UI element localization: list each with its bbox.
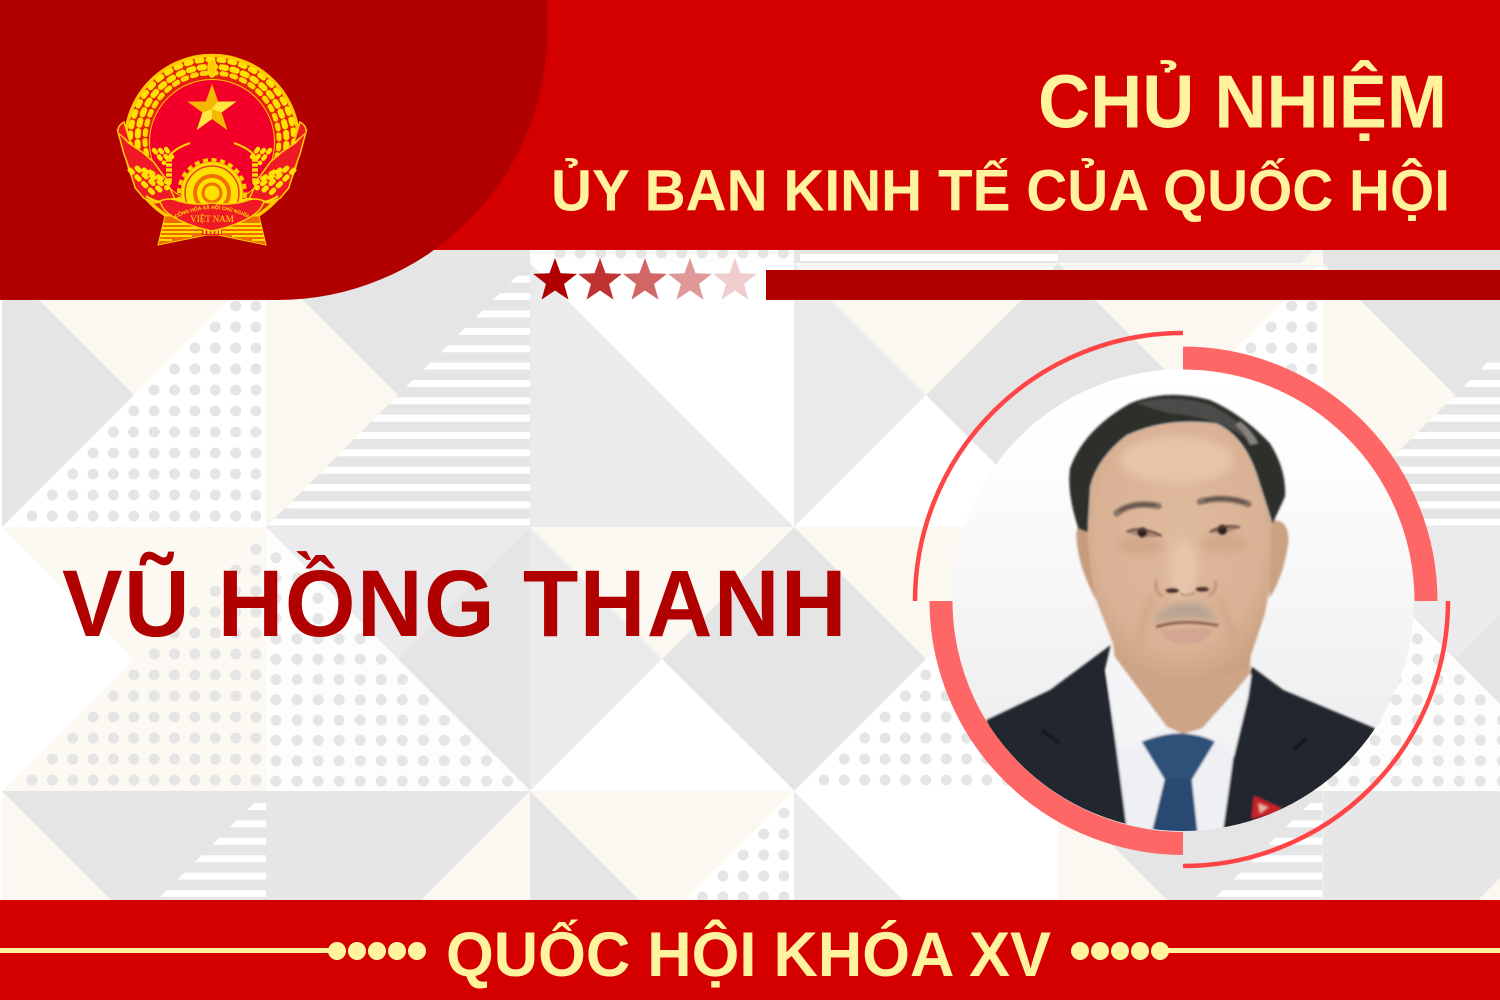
portrait photo	[952, 369, 1414, 840]
emblem gear	[179, 160, 245, 226]
shirt	[1105, 676, 1236, 830]
emblem wreath	[126, 56, 298, 228]
hair	[1069, 395, 1285, 532]
brows	[1117, 504, 1158, 513]
decorative ring: thick bottom-left arc	[941, 601, 1183, 844]
mouth	[1160, 629, 1213, 644]
emblem scroll with name	[159, 198, 265, 232]
heading: position title line 2: ỦY BAN KINH TẾ CỦA QUỐC HỘI	[551, 158, 1450, 224]
footer right ornament	[1071, 942, 1500, 960]
background: geometric triangle pattern	[2, 250, 1500, 900]
suit	[987, 645, 1128, 840]
footer band	[0, 900, 1500, 1000]
emblem star	[188, 84, 236, 130]
neck	[1112, 643, 1252, 735]
emblem ribbons and rice ears	[118, 122, 306, 205]
header dark red corner shape	[0, 0, 548, 300]
fading star row	[533, 258, 757, 300]
emblem base	[158, 216, 266, 245]
eyes	[1127, 530, 1162, 537]
heading: position title line 1: CHỦ NHIỆM	[1038, 60, 1447, 144]
decorative ring: thin bottom-right arc	[1183, 601, 1448, 866]
emblem scroll with name: VIỆT NAM	[190, 214, 234, 224]
footer title: QUỐC HỘI KHÓA XV	[446, 919, 1051, 990]
footer left ornament	[0, 942, 426, 960]
emblem scroll with name: CỘNG HÒA XÃ HỘI CHỦ NGHĨA	[174, 204, 249, 218]
decorative ring: thin top-left arc	[915, 333, 1183, 601]
tie	[1142, 733, 1215, 780]
ears	[1076, 526, 1096, 600]
flag pin	[1252, 796, 1282, 819]
dark red bar	[766, 270, 1500, 300]
nose	[1166, 588, 1179, 593]
name: VŨ HỒNG THANH	[62, 551, 848, 657]
face	[1087, 422, 1272, 683]
decorative ring: thick top-right arc	[1183, 358, 1426, 601]
face shading	[1117, 437, 1248, 643]
icon: Vietnam national emblem	[116, 54, 308, 246]
header band	[0, 0, 1500, 250]
